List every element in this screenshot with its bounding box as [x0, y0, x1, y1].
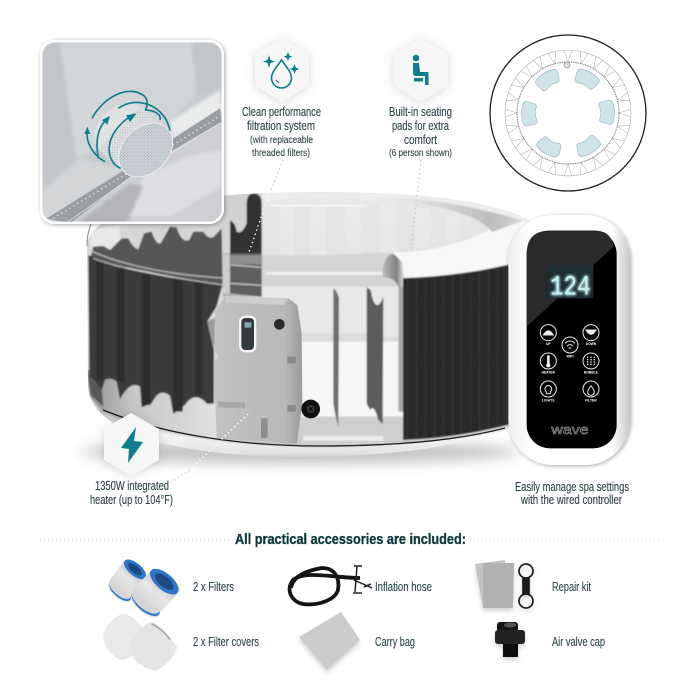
button labels: HEATER	[542, 370, 556, 374]
accessory: air valve cap	[495, 622, 525, 657]
accessories divider lines	[40, 539, 660, 541]
front right rim arch	[383, 254, 404, 287]
filters label: 2 x Filters	[193, 580, 234, 594]
back filter	[106, 556, 149, 604]
seat pads	[522, 66, 614, 160]
rim inner lip shading	[415, 200, 522, 232]
seating caption: comfort	[404, 133, 437, 147]
controller face	[527, 231, 617, 448]
valve mark	[564, 62, 570, 68]
right black wood panel	[402, 264, 508, 441]
controller buttons	[540, 325, 599, 397]
dark corner pillar shade	[398, 285, 405, 412]
right vertical strips	[333, 288, 339, 427]
filter close-up inset	[40, 40, 224, 225]
hot tub cutaway	[80, 160, 560, 482]
heater caption: 1350W integrated	[95, 479, 169, 493]
heater caption: heater (up to 104°F)	[90, 493, 173, 507]
front filter	[127, 564, 183, 621]
heater caption	[90, 479, 173, 507]
left wall curtain lower	[88, 255, 223, 414]
top rim strip	[410, 197, 528, 221]
controller caption: Easily manage spa settings	[515, 480, 629, 494]
LED display: 124	[550, 273, 591, 304]
button labels: FILTER	[585, 398, 597, 402]
icon: seated person	[413, 55, 428, 85]
drain port	[301, 400, 320, 418]
filtration caption: (with replaceable	[250, 134, 313, 146]
box small port	[274, 319, 285, 330]
button labels: WIFI	[566, 355, 574, 359]
filtration caption	[242, 105, 321, 159]
left wall curtain upper	[90, 227, 223, 287]
white front rim	[392, 220, 530, 280]
button labels	[542, 342, 599, 402]
bottom base lip	[96, 408, 509, 457]
button labels: LIGHTS	[542, 398, 555, 402]
accessories heading: All practical accessories are included:	[235, 532, 466, 548]
filtration icon hexagon	[255, 39, 309, 102]
box mini controller	[239, 316, 256, 352]
accessory: repair kit	[475, 560, 533, 608]
icon: water drop with sparkles	[263, 52, 300, 88]
back dark column	[230, 193, 262, 297]
inset background folds	[40, 40, 224, 225]
tub body	[87, 192, 529, 457]
controller shell	[508, 215, 630, 465]
seating caption	[389, 105, 452, 159]
callout dotted lines	[171, 160, 421, 482]
accessory: filter covers	[103, 614, 177, 669]
filtration caption: filtration system	[247, 119, 315, 133]
button labels: DOWN	[586, 342, 597, 346]
far inner wall	[262, 195, 489, 254]
curtain folds	[97, 262, 202, 412]
inflation hose label: Inflation hose	[375, 580, 432, 594]
ring lines	[89, 250, 223, 285]
accessory: filters	[106, 556, 183, 621]
seating caption: (6 person shown)	[389, 147, 452, 159]
button labels: UP	[546, 342, 551, 346]
controller caption	[515, 480, 629, 507]
inner wall ribs	[280, 205, 460, 255]
outer rim circle	[490, 35, 646, 191]
heater icon hexagon	[104, 413, 159, 476]
tub outline	[87, 197, 130, 246]
filtration caption: threaded filters)	[252, 147, 310, 159]
mottled reflection	[206, 317, 215, 349]
top-down seating diagram	[490, 35, 646, 191]
seating caption: pads for extra	[392, 119, 449, 133]
carry bag label: Carry bag	[375, 635, 415, 649]
accessory: carry bag	[299, 612, 360, 670]
filter covers label: 2 x Filter covers	[193, 635, 259, 649]
heater control box	[214, 296, 320, 444]
tub ground shadow	[80, 441, 520, 463]
seating icon hexagon	[394, 39, 448, 102]
under-curtain floor	[87, 370, 217, 443]
LED display	[547, 265, 593, 304]
seating caption: Built-in seating	[389, 105, 452, 119]
lower left corner	[88, 375, 103, 407]
controller caption: with the wired controller	[520, 493, 622, 507]
accessory: inflation hose	[290, 566, 372, 604]
truss ring	[505, 50, 631, 176]
air valve cap label: Air valve cap	[552, 635, 605, 649]
repair kit label: Repair kit	[552, 580, 591, 594]
repair wrench	[519, 564, 533, 608]
icon: lightning bolt	[121, 427, 143, 463]
wired controller	[508, 215, 630, 465]
wave logo: wave	[550, 422, 589, 437]
lower interior wall	[87, 193, 405, 445]
filtration caption: Clean performance	[242, 105, 321, 119]
button labels: BUBBLE	[584, 370, 599, 374]
